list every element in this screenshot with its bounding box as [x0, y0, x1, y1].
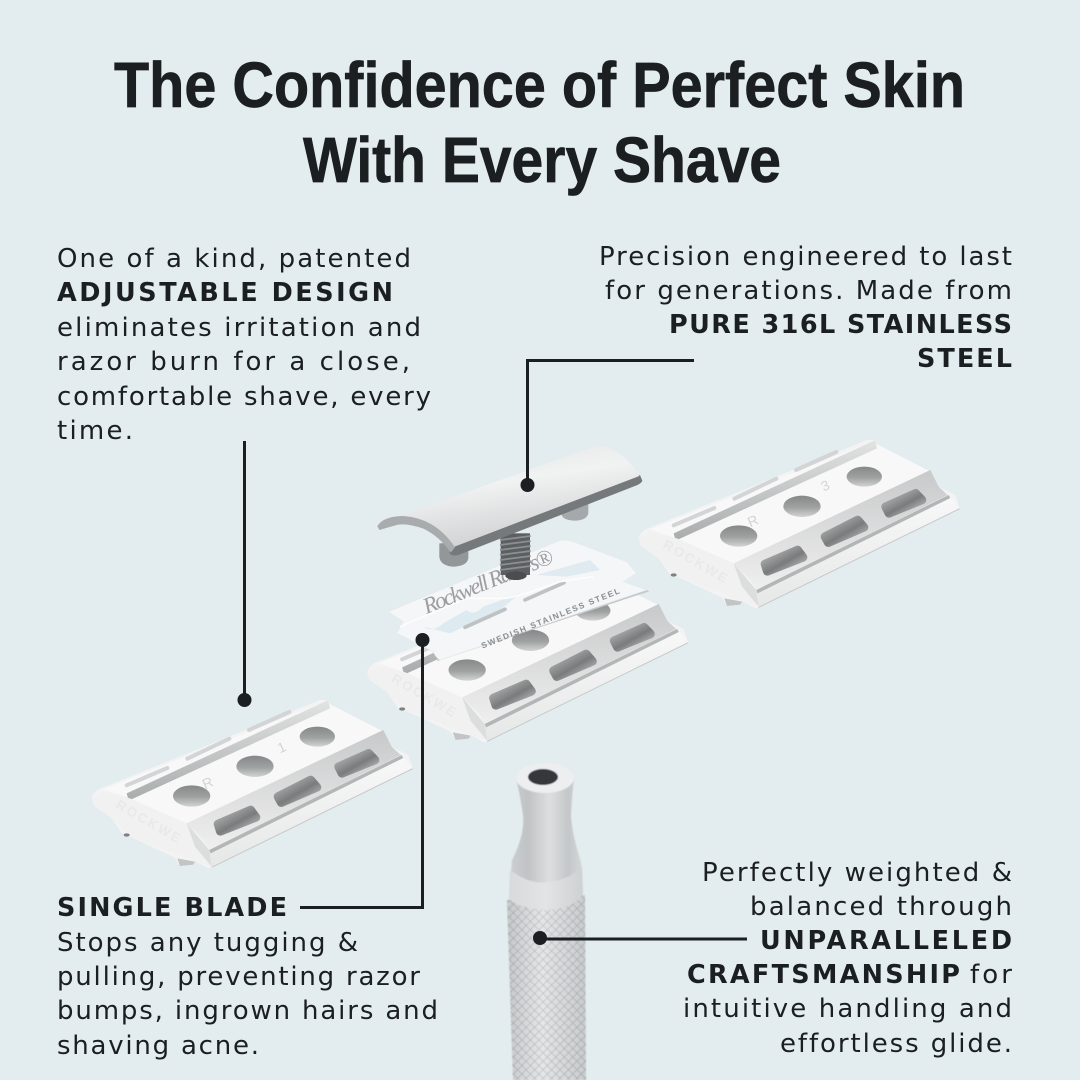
- callout: steel leader: [520, 360, 694, 492]
- text block: stainless steel: [599, 242, 1012, 374]
- text block: craftsmanship: for: [970, 960, 1012, 990]
- screw: [500, 533, 531, 580]
- callout: adjustable design leader: [238, 441, 252, 707]
- text block: single blade: bumps, ingrown hairs and: [57, 996, 438, 1026]
- razor plate: right (R 3): 3: [818, 477, 832, 494]
- razor blade: [388, 540, 649, 661]
- text block: single blade: [57, 893, 438, 1061]
- title: With Every Shave: [303, 124, 781, 196]
- title: [114, 49, 965, 196]
- text block: single blade: shaving acne.: [57, 1031, 259, 1061]
- cap dark edge: [449, 475, 642, 555]
- title: The Confidence of Perfect Skin: [114, 49, 965, 121]
- text block: adjustable design: One of a kind, patented: [57, 244, 411, 274]
- text block: single blade: pulling, preventing razor: [57, 962, 420, 992]
- text block: stainless steel: PURE 316L STAINLESS: [669, 310, 1012, 340]
- razor plate: left (R 1): R: [200, 773, 215, 792]
- text block: stainless steel: for generations. Made from: [605, 276, 1012, 306]
- text block: craftsmanship: [683, 858, 1012, 1059]
- text block: stainless steel: STEEL: [917, 344, 1012, 374]
- callout: single blade leader: [300, 633, 430, 908]
- text block: craftsmanship: intuitive handling and: [683, 994, 1012, 1024]
- text block: craftsmanship: balanced through: [750, 892, 1012, 922]
- text block: craftsmanship: CRAFTSMANSHIP: [687, 960, 960, 990]
- razor handle: [507, 763, 586, 1080]
- text block: adjustable design: eliminates irritation and: [57, 313, 421, 343]
- text block: single blade: SINGLE BLADE: [57, 893, 287, 923]
- razor plate: right (R 3): [639, 440, 960, 608]
- cap arched end: [377, 516, 455, 553]
- text block: adjustable design: [57, 244, 431, 446]
- razor plate: left (R 1): 1: [275, 738, 289, 756]
- razor plate: centre: [367, 574, 688, 742]
- text block: adjustable design: razor burn for a close,: [57, 347, 410, 377]
- callout: handle leader: [533, 931, 747, 945]
- text block: craftsmanship: UNPARALLELED: [760, 926, 1012, 956]
- text block: adjustable design: comfortable shave, every: [57, 382, 431, 412]
- knurled grip: [507, 895, 586, 1080]
- text block: craftsmanship: Perfectly weighted &: [702, 858, 1012, 888]
- blade steel text: SWEDISH STAINLESS STEEL: [480, 586, 621, 650]
- text block: adjustable design: time.: [57, 416, 133, 446]
- text block: single blade: Stops any tugging &: [57, 928, 358, 958]
- cap legs: [439, 542, 468, 567]
- razor plate: left (R 1): [92, 700, 413, 868]
- text block: craftsmanship: effortless glide.: [780, 1029, 1012, 1059]
- text block: stainless steel: Precision engineered to last: [599, 242, 1012, 272]
- blade brand text: Rockwell Razors®: [418, 544, 557, 619]
- razor plate: right (R 3): R: [745, 511, 761, 530]
- text block: adjustable design: ADJUSTABLE DESIGN: [57, 278, 393, 308]
- top cap with screw: [377, 445, 642, 580]
- cap top surface: [400, 445, 639, 547]
- collar and neck: [509, 778, 583, 910]
- top opening: [516, 763, 574, 793]
